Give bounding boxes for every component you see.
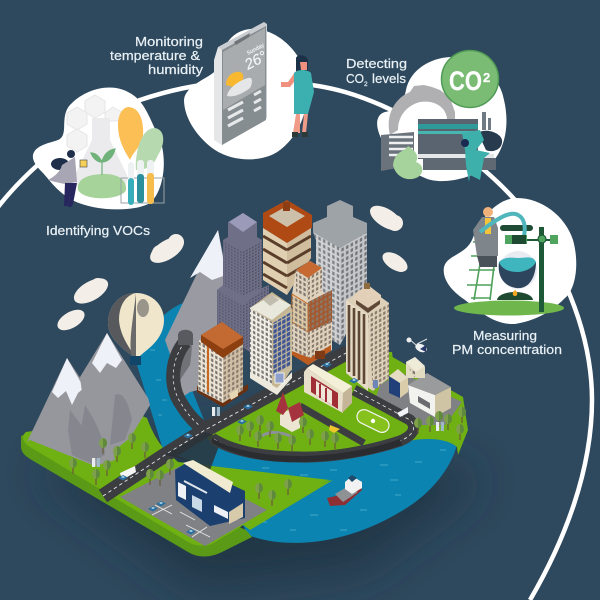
small tan block [406, 357, 425, 378]
ground ellipse [454, 300, 564, 316]
platform side [21, 432, 252, 556]
ladder [467, 240, 498, 300]
road: bridge and main avenue [103, 352, 348, 496]
heading: Monitoring temperature and humidity: humidity [148, 63, 204, 77]
boat [327, 475, 362, 506]
yellow leaf [118, 107, 143, 160]
tower orange [292, 261, 332, 365]
small blue block [389, 369, 408, 398]
tunnel [178, 330, 193, 345]
plant [393, 146, 422, 179]
phone: Sunday [246, 43, 266, 57]
central island [205, 352, 405, 461]
weather sun [226, 72, 243, 88]
river [137, 303, 457, 543]
right grass [385, 355, 468, 455]
grey plaza [375, 372, 462, 425]
helicopter [406, 338, 428, 354]
warehouse [408, 373, 451, 417]
panel: temperature and humidity [184, 22, 314, 159]
cloud [70, 273, 112, 309]
heading: Monitoring temperature and humidity: Monitoring [135, 35, 203, 49]
man [473, 207, 498, 267]
glass flask [480, 214, 537, 289]
back mountain [165, 230, 240, 400]
phone data lines [228, 91, 261, 126]
grass beside mall [210, 477, 333, 530]
vehicles [118, 362, 408, 480]
park paths [262, 432, 295, 438]
grass left bank [23, 415, 330, 546]
panel: PM concentration [444, 198, 576, 324]
heading: Detecting CO2 levels [346, 57, 407, 88]
scientist [48, 150, 87, 207]
heading: Detecting CO2 levels: Detecting [346, 57, 407, 71]
CO2 badge [442, 50, 498, 108]
cloud [379, 248, 411, 276]
weather cloud [227, 78, 252, 96]
stand [497, 227, 558, 312]
heading: Measuring PM concentration: PM concentration [452, 343, 562, 357]
heading: Identifying VOCs: Identifying VOCs [46, 224, 150, 238]
temperature: 26° [241, 48, 270, 74]
test tubes [121, 160, 164, 205]
tower brown stripes [263, 200, 312, 295]
cloud [366, 201, 406, 235]
heading: Detecting CO2 levels: CO [346, 72, 364, 86]
mountain left [27, 358, 115, 466]
blob: monitoring [184, 29, 308, 159]
road: lower ring [212, 390, 414, 462]
sensors [92, 407, 444, 467]
trees [69, 407, 466, 506]
cloud [146, 232, 188, 268]
tower beige [346, 283, 389, 391]
red brick hall [304, 364, 352, 413]
blob: PM [444, 198, 576, 324]
phone [214, 22, 270, 145]
flask [75, 118, 127, 191]
hot air balloon [108, 293, 164, 365]
CO2 badge: CO [449, 66, 482, 96]
road: inner street [300, 406, 364, 443]
mountain right [80, 333, 150, 466]
water ripples [150, 350, 446, 530]
tower grey [313, 200, 367, 345]
heading: Detecting CO2 levels: levels [372, 72, 406, 86]
tower brown roof [197, 322, 248, 407]
gear [389, 85, 455, 145]
factory [381, 112, 496, 171]
isometric city [21, 200, 468, 556]
soil mound [78, 174, 126, 198]
road: tunnel curve [173, 342, 207, 431]
platform shadow [40, 420, 480, 590]
parking markings [148, 501, 210, 537]
heading: Detecting CO2 levels: 2 [364, 81, 368, 88]
worker with hair [461, 130, 502, 182]
heading: Monitoring temperature and humidity [110, 35, 204, 77]
mall [175, 460, 245, 526]
cloud [54, 306, 88, 334]
parking lot [120, 466, 267, 546]
CO2 badge: 2 [483, 70, 490, 85]
panel: identifying VOCs [33, 88, 164, 209]
heading: Measuring PM concentration: Measuring [473, 329, 537, 343]
hexagon pattern [67, 95, 123, 152]
football pitch [342, 406, 400, 441]
blob: CO2 [377, 57, 506, 181]
woman [281, 55, 314, 137]
church [276, 392, 304, 432]
green leaf [136, 128, 163, 170]
tower white blue [250, 292, 292, 395]
sprout [91, 149, 115, 175]
tower purple [217, 213, 269, 352]
heading: Monitoring temperature and humidity: temperature & [110, 49, 201, 63]
panel: CO2 levels [377, 50, 506, 182]
snow [52, 358, 84, 405]
blob: VOCs [33, 88, 164, 209]
heading: Measuring PM concentration [452, 329, 562, 357]
